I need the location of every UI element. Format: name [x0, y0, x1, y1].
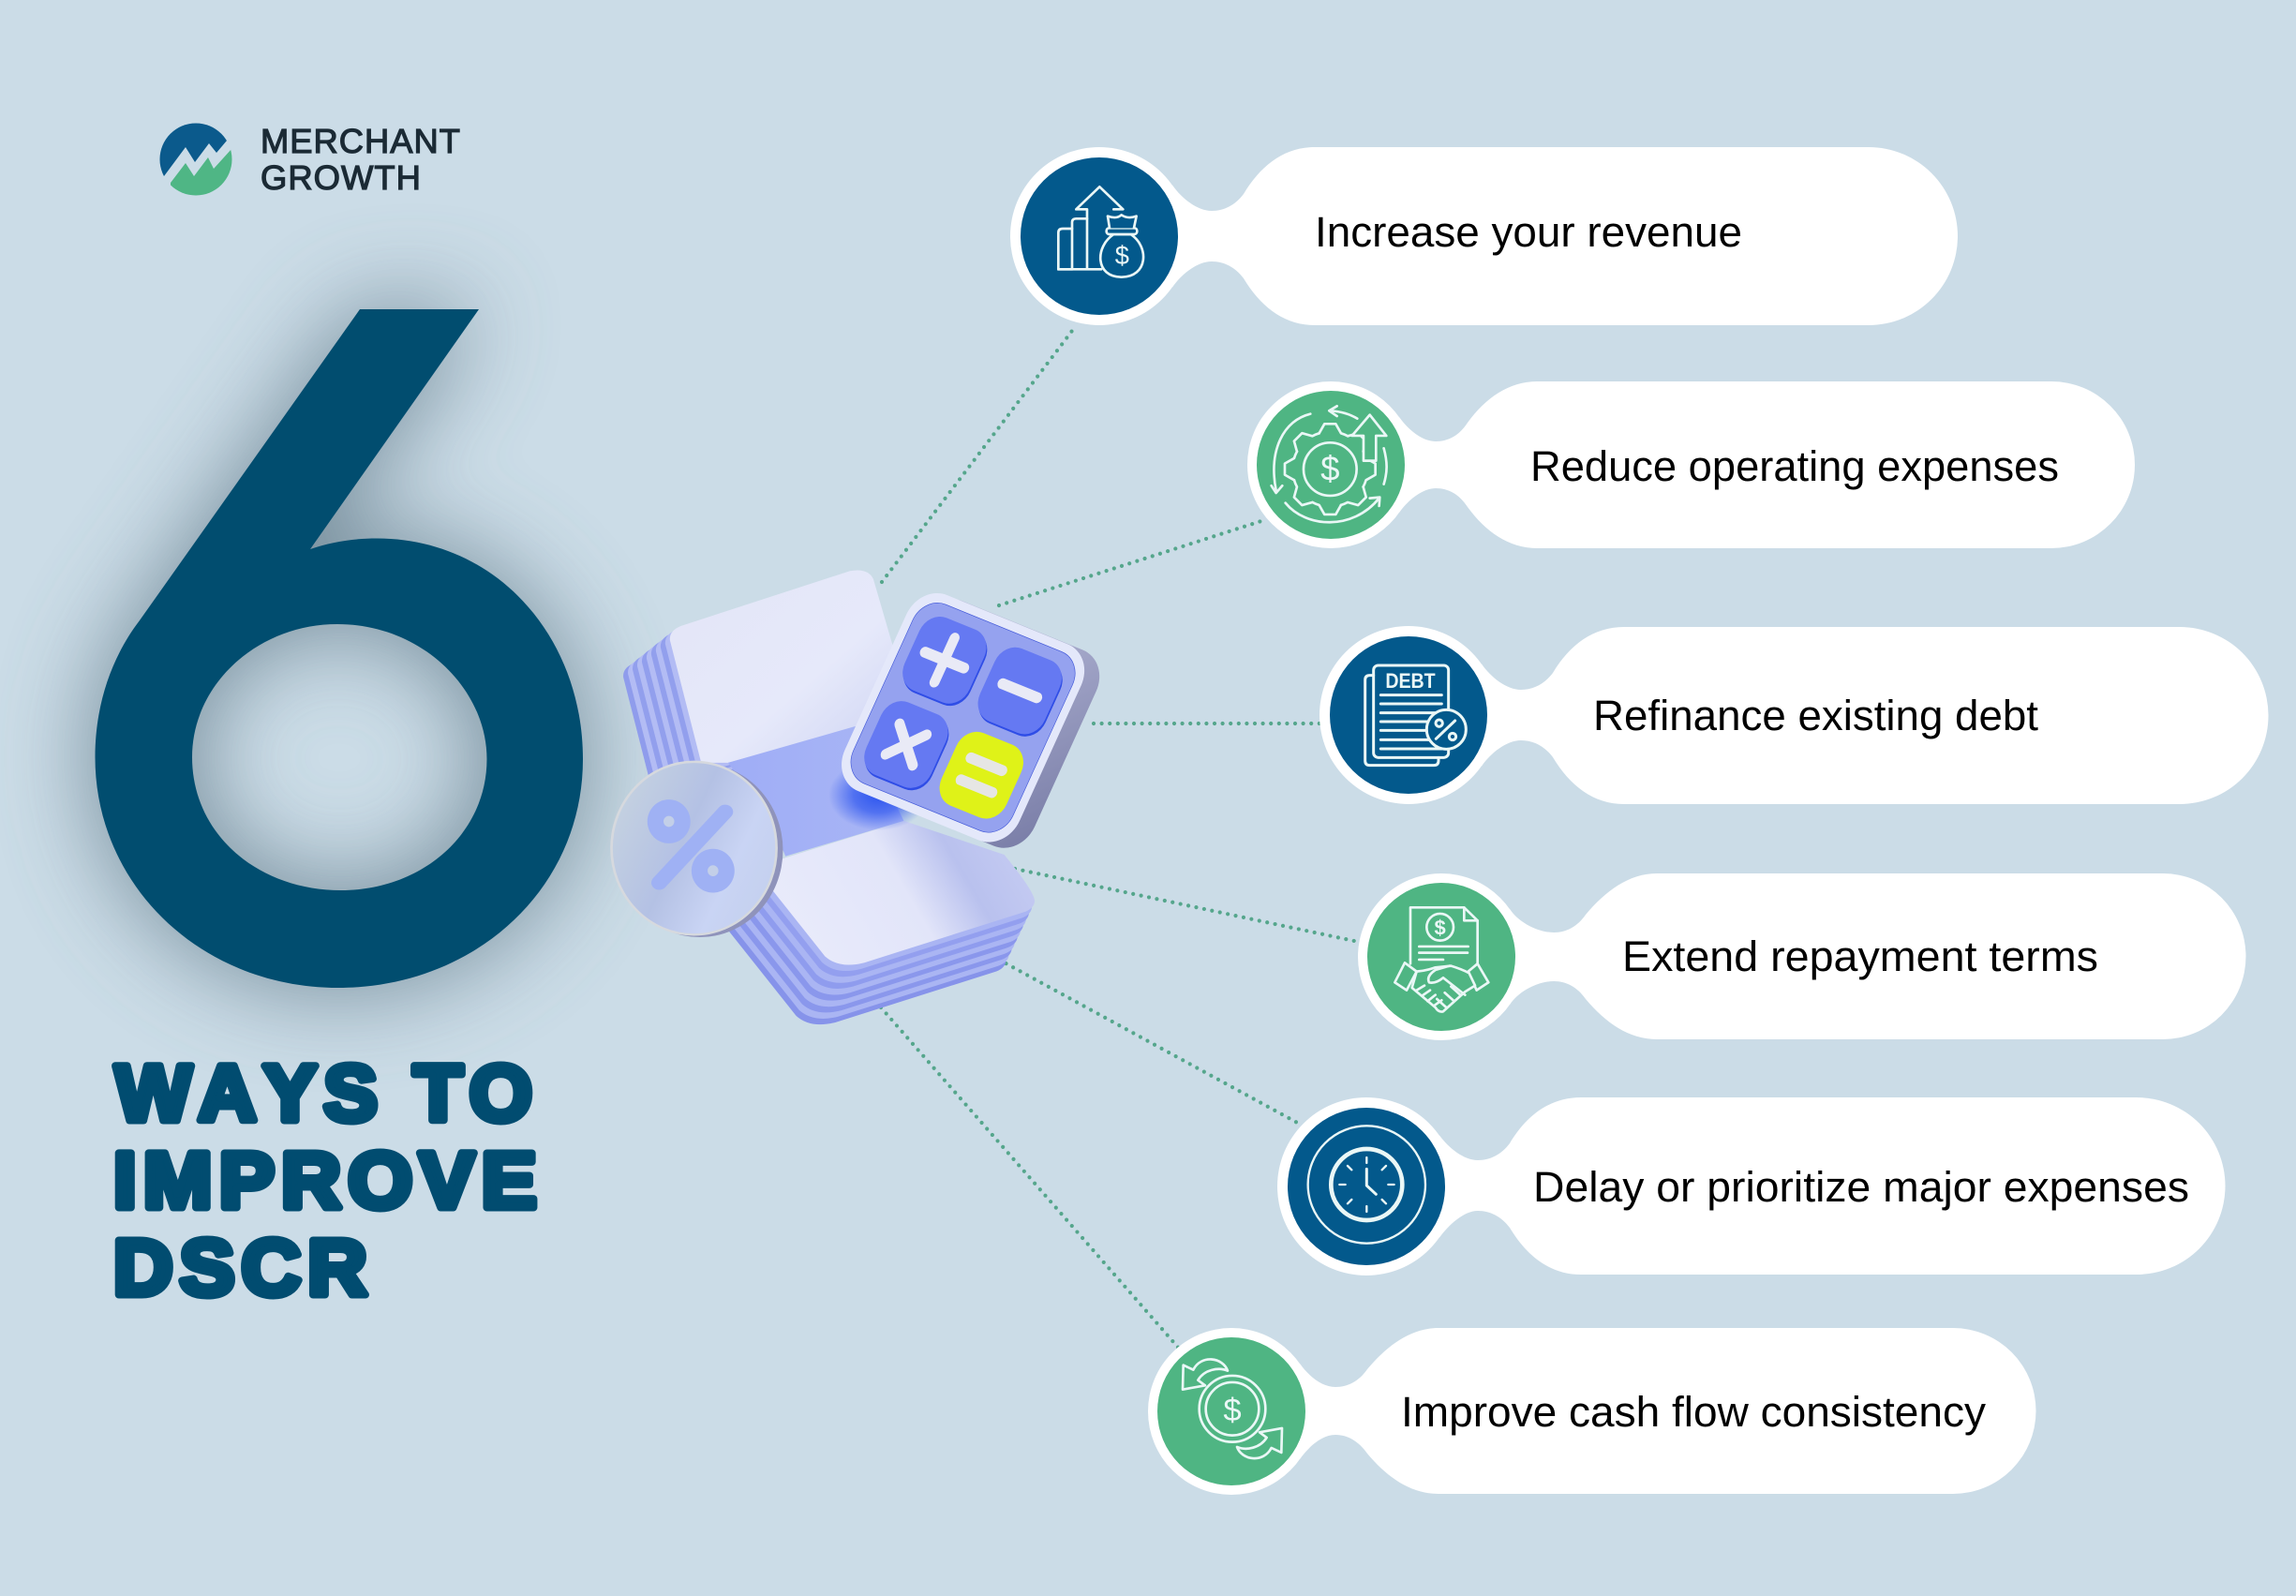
item 3: refinance existing debt [1319, 626, 2268, 804]
equals key [961, 758, 1002, 793]
item 3 label: Refinance existing debt [1593, 692, 2038, 739]
title [113, 1050, 544, 1312]
title: DSCR [113, 1224, 374, 1312]
multiply key [886, 723, 927, 766]
item 1 icon: revenue chart and money bag: $ [1115, 241, 1129, 270]
big number 6 shadow [96, 309, 583, 988]
item 3 icon: debt document: DEBT [1385, 669, 1436, 693]
calculator face [831, 584, 1095, 851]
item 4 pill [1358, 873, 2245, 1040]
logo wordmark [261, 122, 461, 197]
item 2 icon: gear, dollar and arrows: $ [1320, 450, 1339, 488]
item 2: reduce operating expenses [1247, 381, 2135, 548]
item 6 icon: dollar coin with circular arrows [1157, 1337, 1305, 1485]
item 6 icon: dollar coin with circular arrows: $ [1223, 1393, 1242, 1428]
big number 6 [96, 309, 583, 988]
item 5 icon: clock [1288, 1108, 1445, 1265]
item 4 icon: contract and handshake: $ [1435, 916, 1446, 939]
item 4 label: Extend repayment terms [1622, 932, 2098, 980]
dotted connectors [881, 331, 1354, 1350]
title: WAYS TO [115, 1050, 539, 1138]
item 6 label: Improve cash flow consistency [1401, 1388, 1987, 1436]
item 2 icon: gear, dollar and arrows [1257, 391, 1405, 539]
title: IMPROVE [113, 1136, 544, 1224]
item 1 icon: revenue chart and money bag [1021, 157, 1178, 315]
percent sign [648, 799, 735, 893]
item 1 pill [1010, 147, 1958, 325]
item 1: increase your revenue [1010, 147, 1958, 325]
central illustration: papers, calculator, percent coin [612, 570, 1110, 1024]
calculator [831, 584, 1110, 857]
logo wordmark: GROWTH [261, 158, 422, 197]
item 5 pill [1277, 1097, 2225, 1275]
logo mark [159, 124, 232, 195]
item 5 label: Delay or prioritize major expenses [1533, 1163, 2189, 1211]
paper centre fold band [728, 725, 929, 857]
logo wordmark: MERCHANT [261, 122, 461, 160]
minus key [1003, 684, 1037, 698]
item 3 icon: debt document [1330, 636, 1487, 794]
upper paper stack [623, 570, 893, 799]
item 6 pill [1148, 1328, 2035, 1495]
item 4 icon: contract and handshake [1367, 883, 1515, 1031]
item 4: extend repayment terms [1358, 873, 2245, 1040]
item 2 label: Reduce operating expenses [1530, 442, 2059, 490]
item 2 pill [1247, 381, 2135, 548]
lower paper stack [724, 821, 1035, 1024]
item 3 pill [1319, 626, 2268, 804]
logo [159, 124, 460, 195]
plus key [915, 630, 974, 690]
item 5: delay or prioritize major expenses [1277, 1097, 2225, 1275]
item 6: improve cash flow consistency [1148, 1328, 2035, 1495]
calculator back edge [846, 589, 1110, 857]
percent coin [612, 762, 783, 937]
item 1 label: Increase your revenue [1315, 208, 1742, 256]
